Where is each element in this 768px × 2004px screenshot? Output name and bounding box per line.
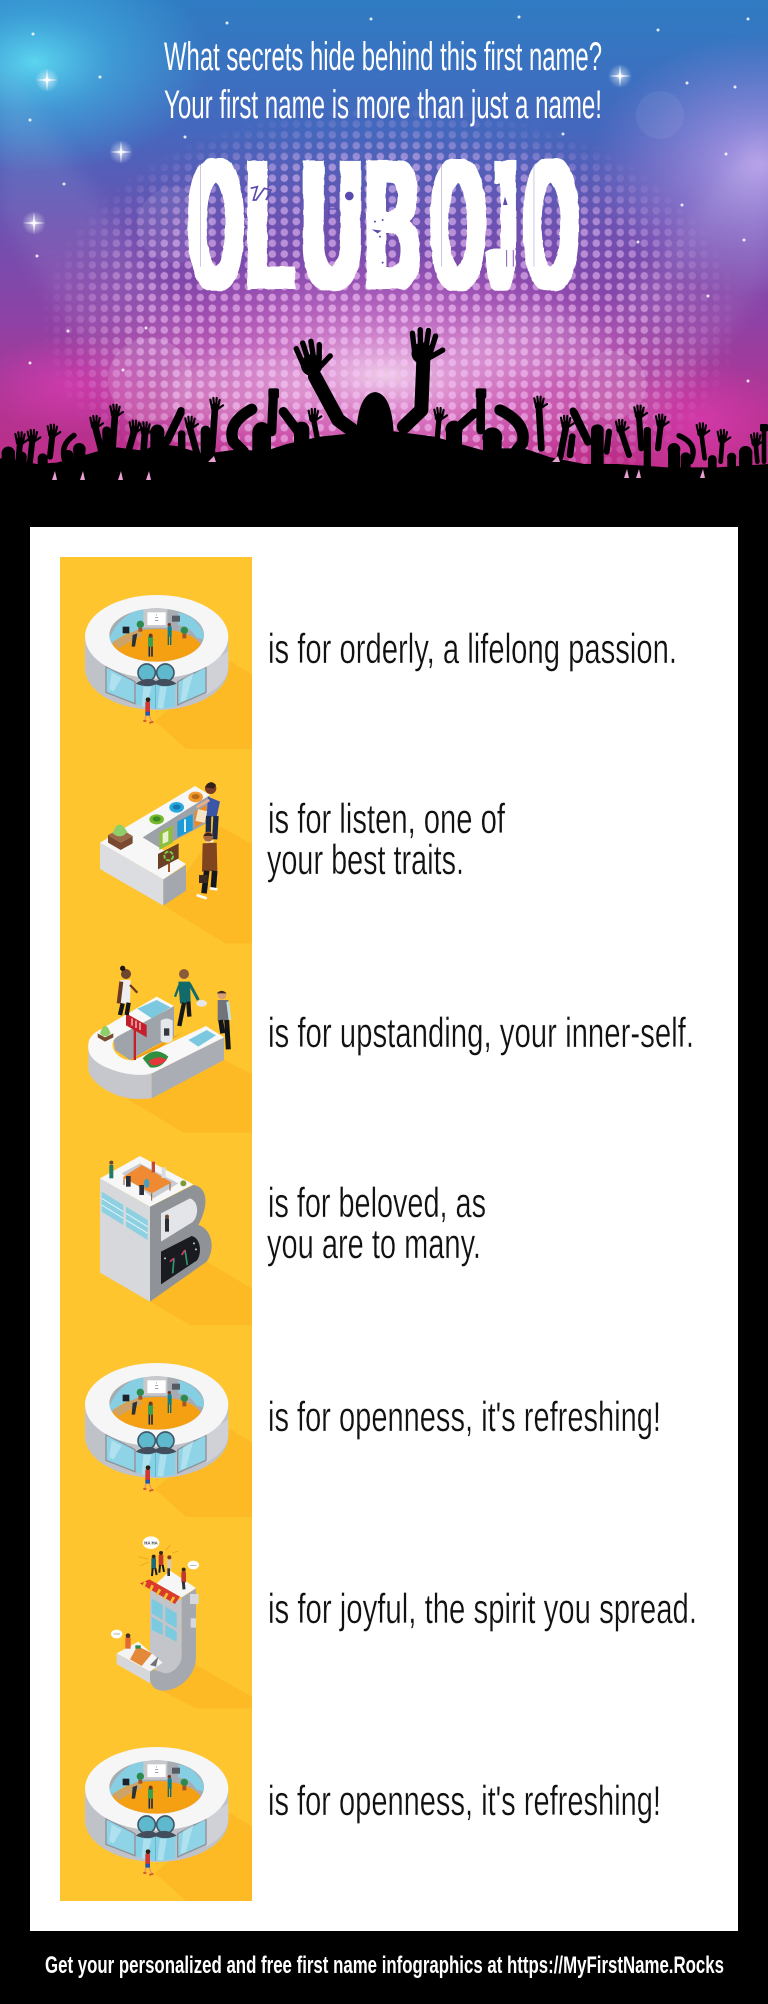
title: OLUBOJO: O <box>190 121 242 327</box>
text: row 4 <box>267 1179 486 1267</box>
icon: letter U restaurant, row 3 <box>88 966 252 1133</box>
text: row 2: your best traits. <box>267 836 464 883</box>
title distress marks <box>201 160 534 267</box>
icon: letter O optician, row 5 <box>85 1363 252 1517</box>
concert background <box>0 0 768 500</box>
title: OLUBOJO: O <box>432 121 484 327</box>
text: row 2: is for listen, one of <box>268 795 505 842</box>
icon: letter O optician, row 1 <box>85 595 252 749</box>
icon: letter J office tower, row 6: HA HA <box>144 1540 159 1545</box>
title: OLUBOJO: J <box>490 121 514 327</box>
title: OLUBOJO: U <box>303 121 361 327</box>
title: OLUBOJO: B <box>366 121 419 327</box>
icon: letter L recycling counter, row 2 <box>100 782 252 943</box>
text: name letter descriptions <box>267 625 697 1824</box>
crowd: left half <box>0 338 384 490</box>
sparkles <box>22 16 750 382</box>
text: O <box>524 121 578 327</box>
text: row 2 <box>267 795 505 883</box>
text: row 4: is for beloved, as <box>268 1179 486 1226</box>
icon: letter O optician, row 7 <box>85 1747 252 1901</box>
panel: yellow illustration column <box>60 557 252 1901</box>
icon: letter B building, row 4 <box>100 1156 252 1325</box>
crowd: right half <box>384 329 768 490</box>
heading: intro lines <box>164 35 602 127</box>
text: row 4: you are to many. <box>267 1220 481 1267</box>
panel: white content card <box>30 527 738 1931</box>
icon: letter J office tower, row 6 <box>111 1536 252 1708</box>
crowd silhouette <box>0 329 768 530</box>
title: OLUBOJO <box>190 121 578 327</box>
title: OLUBOJO: L <box>247 121 293 327</box>
